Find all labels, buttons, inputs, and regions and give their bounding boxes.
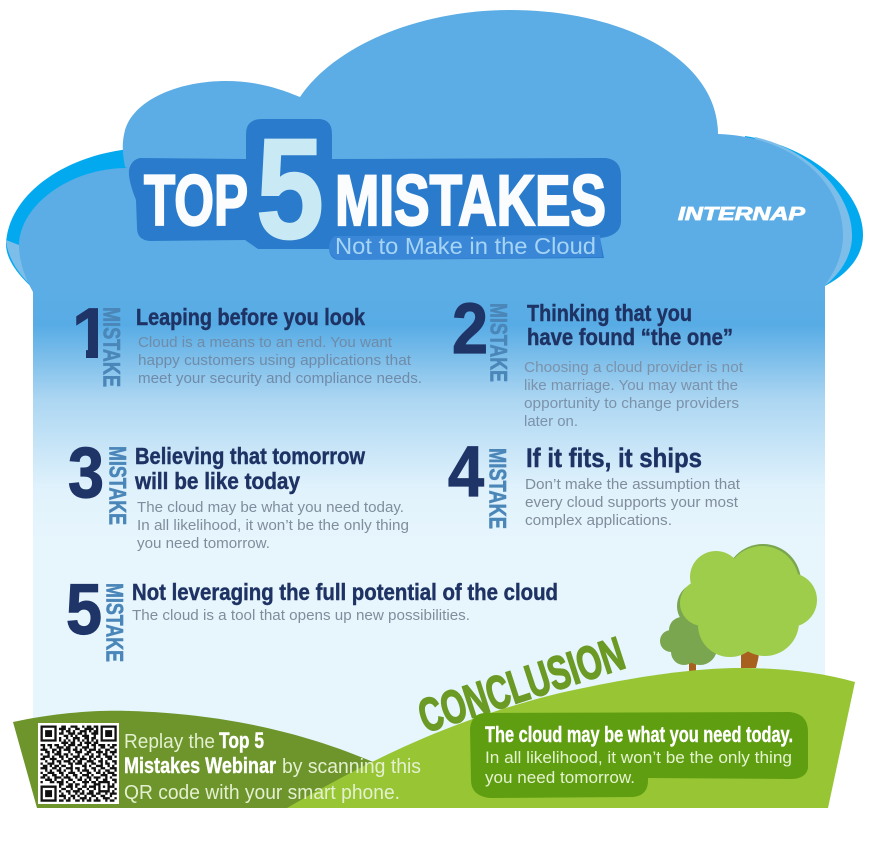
number 4: 4 [448, 433, 484, 512]
heading: Believing that tomorrow [135, 443, 366, 469]
crown [680, 546, 817, 657]
cloud back rim left [6, 149, 130, 298]
body [525, 476, 741, 529]
mistake 5 [66, 571, 558, 662]
icon: large tree [677, 544, 817, 668]
mistake 2 [452, 290, 744, 430]
sky panel [33, 285, 825, 770]
body: you need tomorrow. [137, 535, 270, 552]
mistake 4 [448, 433, 741, 529]
body: In all likelihood, it won’t be the only thing [137, 517, 409, 534]
body: meet your security and compliance needs. [138, 370, 422, 387]
body [524, 359, 744, 430]
heading: Leaping before you look [136, 304, 366, 330]
number 3: 3 [68, 434, 104, 513]
crown shading [677, 582, 725, 630]
light hill [287, 668, 855, 808]
mistake 3 [68, 434, 409, 552]
icon: small tree [660, 617, 717, 672]
body: later on. [524, 413, 578, 430]
mistake 3: will be like today [134, 468, 300, 494]
trunk [741, 645, 760, 668]
cloud back rim right [740, 136, 863, 287]
callout backing [470, 712, 808, 798]
number 5: 5 [66, 571, 102, 650]
number 2: 2 [452, 290, 488, 369]
title word MISTAKES: MISTAKES [335, 162, 606, 241]
conclusion word: CONCLUSION [412, 626, 631, 743]
QR caption: Top 5 [219, 728, 264, 753]
cloud main shape [19, 10, 843, 292]
mistake label: MISTAKE [484, 448, 510, 529]
subtitle backing [329, 235, 602, 260]
heading: Not leveraging the full potential of the cloud [132, 579, 558, 605]
QR caption: Mistakes Webinar [124, 753, 276, 778]
title backing shape [129, 119, 621, 260]
body: opportunity to change providers [524, 395, 739, 412]
subtitle: Not to Make in the Cloud [335, 233, 596, 259]
cloud back rim [6, 136, 863, 298]
QR code [38, 723, 119, 804]
body [137, 499, 409, 552]
callout body: In all likelihood, it won’t be the only thing [485, 748, 792, 767]
body: The cloud may be what you need today. [137, 499, 404, 516]
body: Don’t make the assumption that [525, 476, 741, 493]
body: complex applications. [525, 512, 672, 529]
dark hill [13, 711, 400, 808]
heading: Thinking that you [527, 300, 692, 326]
mistake label: MISTAKE [100, 583, 128, 662]
title [129, 110, 621, 269]
number 1: 1 [72, 295, 112, 374]
QR caption: by scanning this [282, 756, 421, 778]
mistake 2: have found “the one” [527, 324, 733, 350]
QR caption: QR code with your smart phone. [124, 782, 400, 804]
body: like marriage. You may want the [524, 377, 738, 394]
body: every cloud supports your most [525, 494, 739, 511]
body [138, 334, 422, 387]
conclusion callout: you need tomorrow. [485, 768, 635, 787]
body: Cloud is a means to an end. You want [138, 334, 393, 351]
title numeral 5: 5 [256, 110, 324, 269]
conclusion callout [470, 712, 808, 798]
QR caption [124, 728, 421, 804]
heading: If it fits, it ships [526, 443, 702, 473]
mistake 1 [76, 308, 421, 387]
mistake label: MISTAKE [484, 303, 512, 382]
QR caption: Replay the [124, 731, 215, 753]
mistake label: MISTAKE [104, 446, 130, 525]
mistake label: MISTAKE [98, 307, 124, 387]
title word TOP: TOP [144, 162, 248, 241]
logo: Internap: INTERNAP [678, 204, 806, 224]
body: happy customers using applications that [138, 352, 412, 369]
body: Choosing a cloud provider is not [524, 359, 744, 376]
body: The cloud is a tool that opens up new possibilities. [132, 607, 470, 624]
